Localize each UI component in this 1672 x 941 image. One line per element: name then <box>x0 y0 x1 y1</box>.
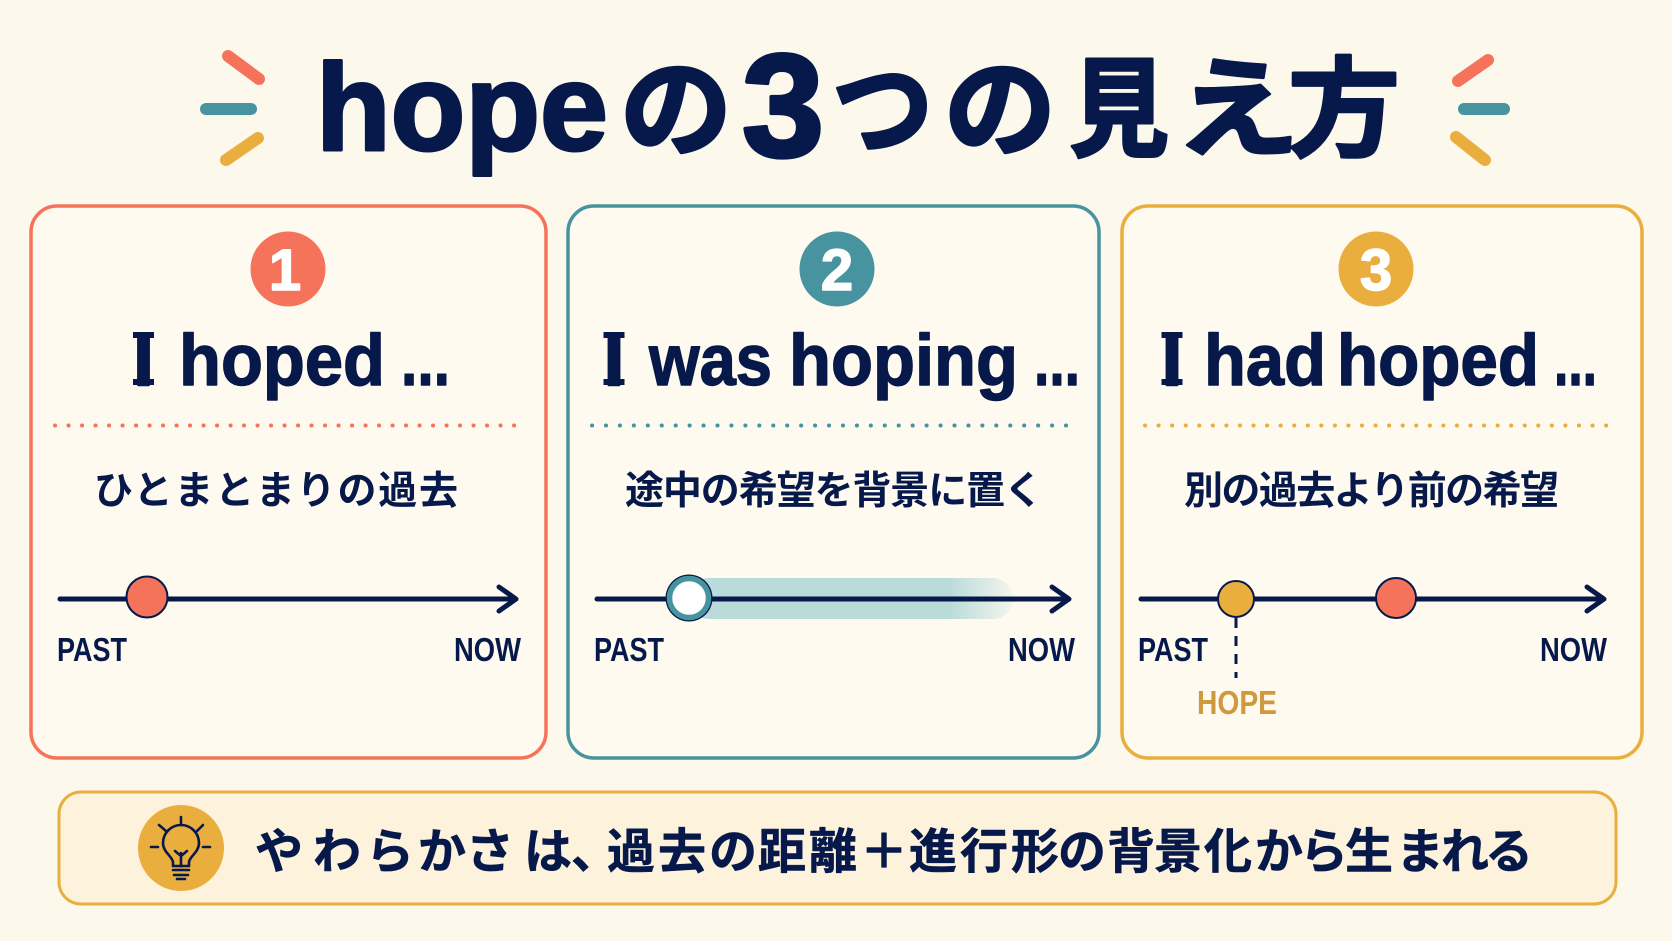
heading <box>604 321 1080 401</box>
badge 2 <box>800 232 874 306</box>
heading: I <box>604 321 624 401</box>
panel border <box>568 206 1099 758</box>
heading: ... <box>1034 321 1080 401</box>
timeline: PAST <box>594 631 664 668</box>
heading: had <box>1204 321 1326 401</box>
title: 見 <box>1069 24 1169 180</box>
timeline: PAST <box>1138 631 1208 668</box>
title <box>316 24 1400 187</box>
title: の <box>944 24 1056 180</box>
panel: I was hoping <box>568 206 1099 758</box>
panel border <box>1122 206 1642 758</box>
timeline <box>1138 578 1608 721</box>
heading: hoped <box>1337 321 1539 401</box>
callout: summary bar <box>59 792 1616 904</box>
heading: hoped <box>179 321 385 401</box>
icon: lightbulb <box>138 805 224 891</box>
timeline: PAST <box>57 631 127 668</box>
subheading: 途中の希望を背景に置く <box>625 460 1043 516</box>
subheading: ひとまとまりの過去 <box>94 460 458 516</box>
heading: ... <box>1554 321 1597 401</box>
badge 1: 1 <box>269 238 301 303</box>
panel: I had hoped <box>1122 206 1642 758</box>
heading: ... <box>401 321 450 401</box>
title: hope <box>316 40 608 177</box>
summary text: やわらかさは、過去の距離＋進行形の背景化から生まれる <box>255 812 1533 882</box>
badge 2: 2 <box>821 238 853 303</box>
icon: left title sparkle <box>206 56 259 160</box>
timeline: NOW <box>454 631 522 668</box>
heading <box>1162 321 1597 401</box>
title: つ <box>832 24 933 180</box>
title: 3 <box>742 24 824 187</box>
timeline <box>57 576 522 668</box>
panel border <box>31 206 546 758</box>
heading <box>133 321 450 401</box>
title: え <box>1175 24 1300 180</box>
heading: hoping <box>789 321 1018 401</box>
title: の <box>620 24 732 180</box>
badge 3: 3 <box>1360 238 1392 303</box>
panel: I hoped <box>31 206 546 758</box>
timeline: NOW <box>1540 631 1608 668</box>
title: 方 <box>1288 24 1400 180</box>
HOPE label: HOPE <box>1197 684 1277 721</box>
timeline <box>594 574 1076 668</box>
subheading: 別の過去より前の希望 <box>1184 460 1559 516</box>
heading: was <box>648 321 772 401</box>
heading: I <box>133 321 154 401</box>
icon: right title sparkle <box>1456 60 1504 160</box>
heading: I <box>1162 321 1182 401</box>
timeline: NOW <box>1008 631 1076 668</box>
badge 3 <box>1338 232 1414 306</box>
badge 1 <box>250 232 326 306</box>
